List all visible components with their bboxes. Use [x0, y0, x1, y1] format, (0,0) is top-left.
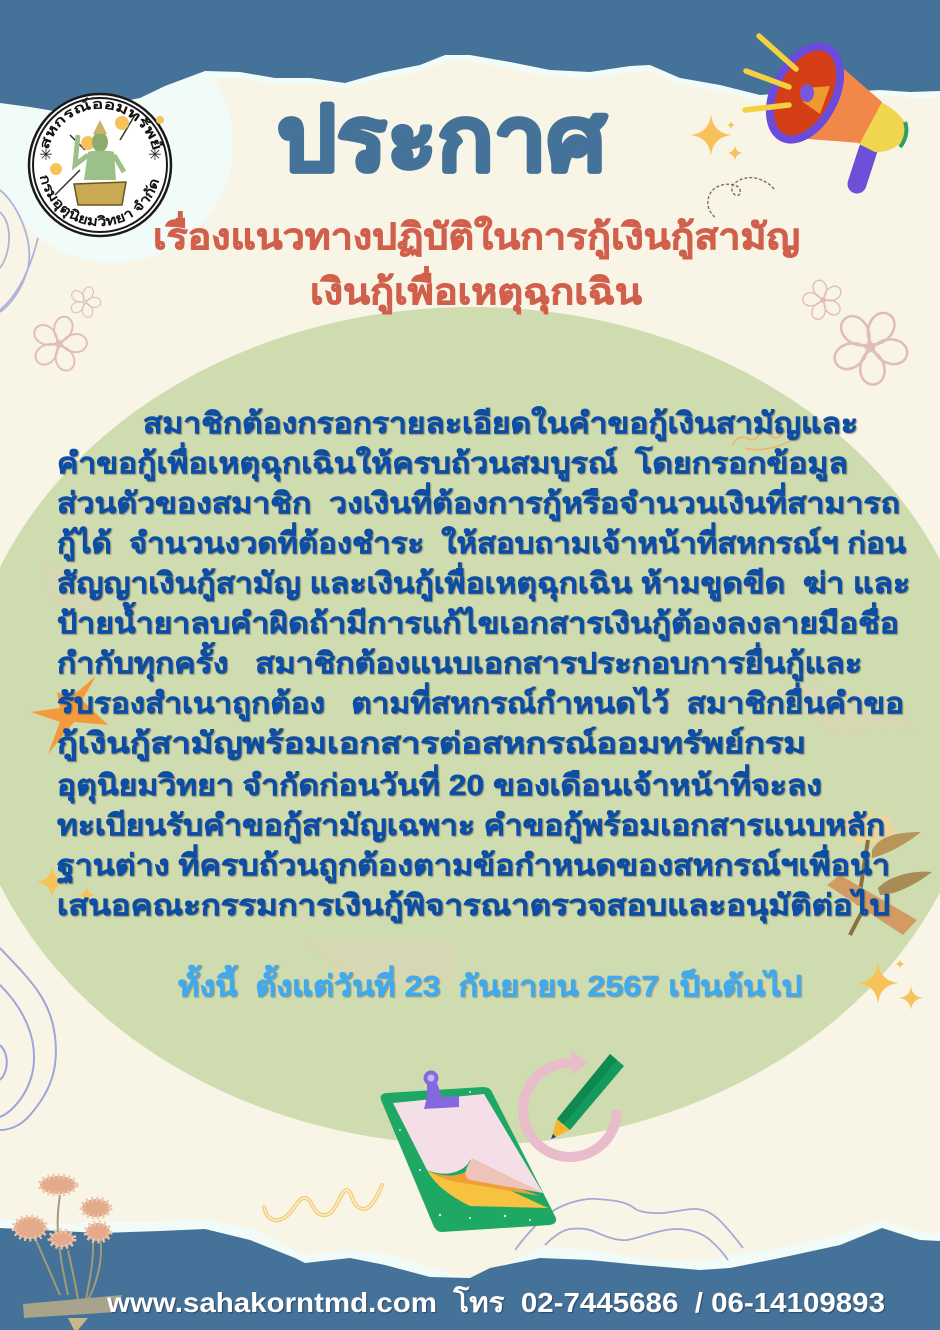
megaphone rim	[756, 35, 854, 151]
body paragraph: กำกับทุกครั้ง สมาชิกต้องแนบเอกสารประกอบการยื่นกู้และ	[57, 641, 862, 681]
body paragraph: รับรองสำเนาถูกต้อง ตามที่สหกรณ์กำหนดไว้ สมาชิกยื่นคำขอ	[57, 682, 904, 721]
clipboard speckles	[399, 1091, 531, 1221]
logo seal: กรมอุตุนิยมวิทยา จำกัด	[40, 175, 160, 226]
body paragraph: ส่วนตัวของสมาชิก วงเงินที่ต้องการกู้หรือจำนวนเงินที่สามารถ	[57, 482, 900, 521]
seal star ornaments: ✳	[148, 147, 162, 164]
seal star ornaments: ✳	[39, 147, 53, 164]
body paragraph: อุตุนิยมวิทยา จำกัดก่อนวันที่ 20 ของเดือนเจ้าหน้าที่จะลง	[57, 764, 822, 803]
subtitle heading	[153, 211, 800, 315]
golden throne	[74, 182, 126, 205]
body paragraph: ฐานต่าง ที่ครบถ้วนถูกต้องตามข้อกำหนดของสหกรณ์ฯเพื่อนำ	[57, 844, 890, 884]
green circle panel	[0, 307, 940, 1145]
decorative lines: left top swirls	[0, 190, 38, 312]
body paragraph: ทะเบียนรับคำขอกู้สามัญเฉพาะ คำขอกู้พร้อมเอกสารแนบหลัก	[57, 810, 885, 843]
yellow squiggle	[264, 1185, 382, 1220]
top torn blue band	[0, 0, 940, 118]
megaphone rays	[745, 36, 796, 110]
body paragraph: เสนอคณะกรรมการเงินกู้พิจารณาตรวจสอบและอนุมัติต่อไป	[57, 888, 890, 923]
title: ประกาศ	[277, 90, 608, 190]
bottom torn blue band	[0, 1218, 940, 1330]
clipboard board	[381, 1087, 556, 1232]
clipboard orange page edge	[428, 1168, 540, 1196]
seal text	[48, 109, 153, 150]
clipboard yellow pages	[427, 1170, 548, 1208]
icon: flower left large	[23, 309, 95, 379]
effective date: ทั้งนี้ ตั้งแต่วันที่ 23 กันยายน 2567 เป็นต้นไป	[178, 964, 802, 1003]
megaphone body	[795, 62, 882, 143]
clipboard page curl	[466, 1158, 543, 1193]
body paragraph: กู้ได้ จำนวนงวดที่ต้องชำระ ให้สอบถามเจ้าหน้าที่สหกรณ์ฯ ก่อน	[57, 522, 906, 561]
megaphone handle	[857, 150, 868, 184]
icon: clipboard	[381, 1072, 556, 1232]
clipboard clip	[424, 1072, 459, 1109]
washi tape	[23, 1295, 122, 1318]
deity figure	[75, 120, 124, 180]
body paragraph: สมาชิกต้องกรอกรายละเอียดในคำขอกู้เงินสามัญและ	[143, 406, 858, 441]
icon: circular arrow	[523, 1050, 617, 1157]
body paragraph: คำขอกู้เพื่อเหตุฉุกเฉินให้ครบถ้วนสมบูรณ์ โดยกรอกข้อมูล	[57, 442, 848, 481]
icon: dried flowers bottom left	[14, 1176, 122, 1330]
icon: sparkles left	[36, 866, 96, 904]
logo seal: สหกรณ์ออมทรัพย์	[42, 97, 164, 150]
footer contact line: www.sahakorntmd.com โทร 02-7445686 / 06-14109893	[106, 1285, 885, 1318]
megaphone yellow tail	[855, 99, 906, 152]
logo seal	[28, 92, 172, 238]
icon: sparkles bottom right	[857, 959, 923, 1010]
subtitle heading: เรื่องแนวทางปฏิบัติในการกู้เงินกู้สามัญ	[153, 211, 800, 260]
body paragraph: ป้ายน้ำยาลบคำผิดถ้ามีการแก้ไขเอกสารเงินกู้ต้องลงลายมือชื่อ	[57, 601, 899, 641]
faint tape pieces on green panel	[40, 560, 918, 985]
icon: flower left small	[64, 282, 106, 322]
icon: pencil	[551, 1054, 624, 1139]
pale circle behind logo	[0, 23, 233, 263]
body paragraph: สัญญาเงินกู้สามัญ และเงินกู้เพื่อเหตุฉุกเฉิน ห้ามขูดขีด ฆ่า และ	[57, 562, 910, 601]
body paragraph	[57, 406, 910, 923]
decorative lines: left bottom rings	[0, 948, 56, 1130]
icon: megaphone	[745, 35, 906, 184]
icon: flower right small	[797, 275, 849, 325]
dashed arrow doodle	[708, 178, 774, 218]
icon: dried sprig right	[827, 811, 932, 935]
icon: orange star	[31, 676, 108, 754]
icon: flower right large	[817, 294, 923, 400]
decorative lines: bottom right waves	[515, 1199, 743, 1260]
orange scribble	[732, 430, 795, 450]
body paragraph: กู้เงินกู้สามัญพร้อมเอกสารต่อสหกรณ์ออมทรัพย์กรม	[57, 726, 806, 761]
subtitle heading: เงินกู้เพื่อเหตุฉุกเฉิน	[310, 266, 642, 315]
icon: sparkles near megaphone	[690, 114, 743, 161]
clipboard pink sheet	[393, 1094, 543, 1193]
megaphone center	[803, 86, 830, 114]
seal star ornaments	[39, 147, 162, 164]
